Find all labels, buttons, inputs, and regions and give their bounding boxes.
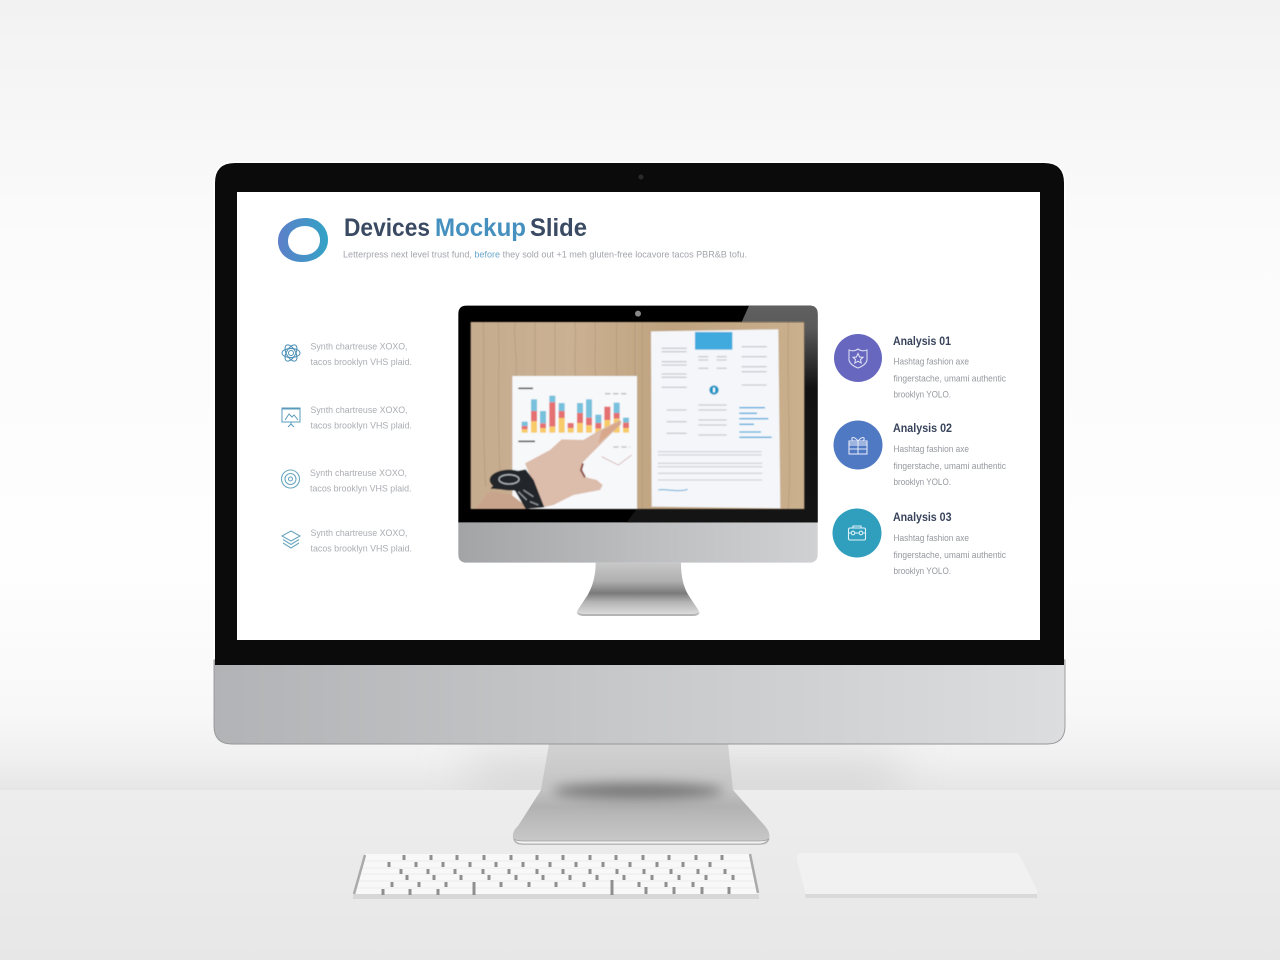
small monitor base rim <box>577 612 700 616</box>
feature 4 <box>282 528 412 554</box>
bezel gloss <box>627 306 818 522</box>
feature 4 text: Synth chartreuse XOXO, <box>310 528 408 539</box>
feature 3 text <box>310 468 412 494</box>
analysis 01 text: Hashtag fashion axe <box>894 356 969 368</box>
resume skill bars <box>739 408 772 437</box>
large monitor <box>214 162 1066 845</box>
feature 2 text <box>310 405 412 432</box>
desk surface <box>0 790 1280 960</box>
monitor chin <box>214 660 1065 744</box>
icon: layers <box>282 531 300 548</box>
feature 3 text: tacos brooklyn VHS plaid. <box>310 484 412 494</box>
badge: shield star <box>834 334 882 382</box>
analysis 02 text: fingerstache, umami authentic <box>894 461 1006 472</box>
wristwatch <box>490 469 544 509</box>
analysis 01 heading: Analysis 01 <box>893 336 952 348</box>
title <box>344 214 587 242</box>
feature 2 text: Synth chartreuse XOXO, <box>310 405 408 416</box>
analysis 02 text <box>894 444 1006 488</box>
resume header <box>695 332 732 350</box>
analysis 02 <box>834 420 1006 488</box>
line chart <box>602 455 632 465</box>
small monitor stand <box>577 563 699 615</box>
small monitor bezel <box>458 306 818 522</box>
feature 1 text <box>310 342 412 368</box>
title: Mockup <box>435 214 526 242</box>
feature 4 text: tacos brooklyn VHS plaid. <box>310 544 412 554</box>
webcam <box>638 174 644 180</box>
stacked bar chart <box>522 396 629 433</box>
monitor bezel <box>215 163 1064 665</box>
title: Devices <box>344 214 430 242</box>
title: Slide <box>530 214 587 242</box>
analysis 01 text: fingerstache, umami authentic <box>894 374 1006 384</box>
analysis 02 heading: Analysis 02 <box>893 423 952 435</box>
feature 1 text: Synth chartreuse XOXO, <box>310 342 408 352</box>
subtitle: Letterpress next level trust fund, before they sold out +1 meh gluten-free locavore tacos PBR&B tofu. <box>343 250 747 260</box>
resume text lines <box>662 347 767 435</box>
feature 1 <box>282 342 412 368</box>
logo <box>278 218 328 262</box>
badge: briefcase <box>832 508 882 558</box>
resume paper <box>651 329 780 508</box>
analysis 03 text: Hashtag fashion axe <box>894 533 969 544</box>
chart label <box>518 388 535 441</box>
badge: gift <box>834 420 882 470</box>
small monitor with photo <box>458 306 818 616</box>
hand and arm <box>475 420 621 509</box>
analysis 01 text <box>894 356 1006 400</box>
photo <box>471 322 804 509</box>
analysis 03 text <box>894 533 1006 577</box>
feature 2 text: tacos brooklyn VHS plaid. <box>310 420 412 432</box>
icon: presentation board <box>282 408 300 427</box>
icon: atom <box>282 343 300 363</box>
monitor shadow on wall <box>470 762 900 802</box>
analysis 03 text: brooklyn YOLO. <box>894 566 951 577</box>
chart paper <box>512 376 637 509</box>
slide screen <box>237 192 1040 640</box>
wood backdrop <box>471 322 804 509</box>
feature 4 text <box>310 528 412 554</box>
resume badge <box>709 385 719 395</box>
monitor stand <box>513 744 770 845</box>
webcam <box>635 311 641 317</box>
left feature list <box>282 342 412 554</box>
small monitor chin <box>458 520 818 563</box>
keyboard <box>353 854 759 899</box>
feature 3 text: Synth chartreuse XOXO, <box>310 468 407 479</box>
feature 1 text: tacos brooklyn VHS plaid. <box>310 357 412 368</box>
analysis 03 text: fingerstache, umami authentic <box>894 550 1006 561</box>
analysis list <box>832 334 1006 577</box>
analysis 03 heading: Analysis 03 <box>893 512 952 524</box>
feature 2 <box>282 405 412 432</box>
analysis 01 text: brooklyn YOLO. <box>894 390 951 400</box>
trackpad <box>797 853 1037 898</box>
feature 3 <box>282 468 412 494</box>
analysis 03 <box>832 508 1006 577</box>
icon: target <box>282 470 300 488</box>
analysis 01 <box>834 334 1006 400</box>
monitor halo <box>214 162 1066 665</box>
analysis 02 text: brooklyn YOLO. <box>894 477 951 488</box>
analysis 02 text: Hashtag fashion axe <box>894 444 969 455</box>
